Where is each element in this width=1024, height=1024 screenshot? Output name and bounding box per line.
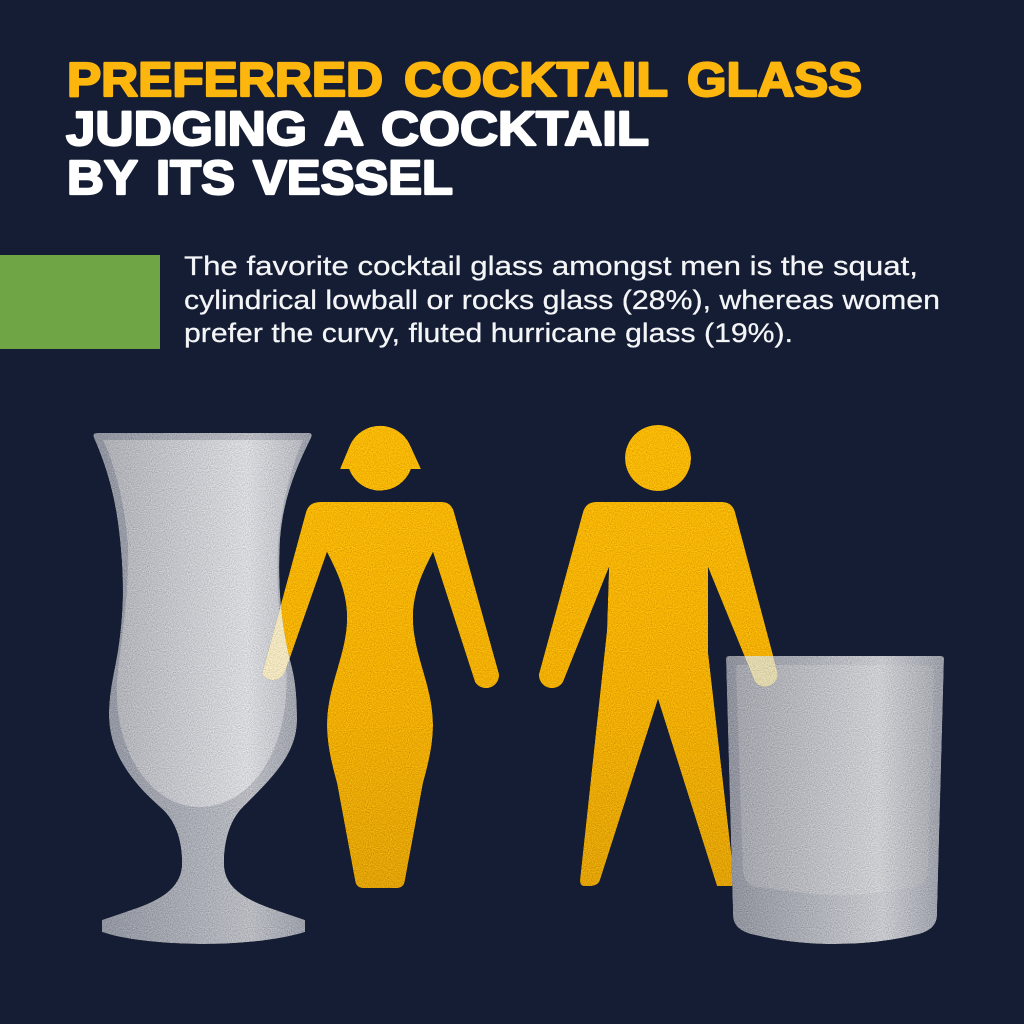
hurricane glass inner bowl: [103, 440, 303, 807]
man's arm seen through glass: [744, 656, 778, 687]
subtitle line 2: [67, 151, 453, 205]
green accent block: [0, 255, 160, 349]
rocks glass inner: [736, 665, 934, 895]
title line: preferred cocktail glass: GLASS: [687, 53, 862, 107]
icon: hurricane glass: [93, 433, 312, 944]
description text: [184, 251, 940, 348]
icon: woman figure: [262, 426, 499, 888]
title: [66, 53, 862, 205]
description line 1: The favorite cocktail glass amongst men is the squat,: [184, 251, 918, 281]
title line: preferred cocktail glass: [67, 53, 862, 107]
woman's arm seen through glass: [262, 605, 290, 680]
title line: preferred cocktail glass: PREFERRED: [67, 53, 383, 107]
subtitle line 1: A: [324, 102, 364, 156]
infographic canvas: [0, 61, 944, 944]
man head: [625, 425, 691, 491]
icon: rocks glass: [726, 656, 944, 944]
woman body: [262, 502, 499, 888]
title line: preferred cocktail glass: COCKTAIL: [404, 53, 668, 107]
subtitle line 1: COCKTAIL: [381, 102, 649, 156]
subtitle line 1: JUDGING: [66, 102, 307, 156]
description line 2: cylindrical lowball or rocks glass (28%), whereas women: [184, 285, 940, 315]
hurricane glass outer shell: [93, 433, 312, 944]
subtitle line 2: BY: [67, 151, 138, 205]
icon: man figure: [539, 425, 778, 886]
rocks glass outer shell: [726, 656, 944, 944]
subtitle line 2: ITS: [156, 151, 235, 205]
woman head with hair: [340, 426, 421, 491]
subtitle line 2: VESSEL: [253, 151, 453, 205]
description line 3: prefer the curvy, fluted hurricane glass (19%).: [184, 318, 793, 348]
subtitle line 1: [66, 102, 649, 156]
man body: [539, 502, 778, 886]
